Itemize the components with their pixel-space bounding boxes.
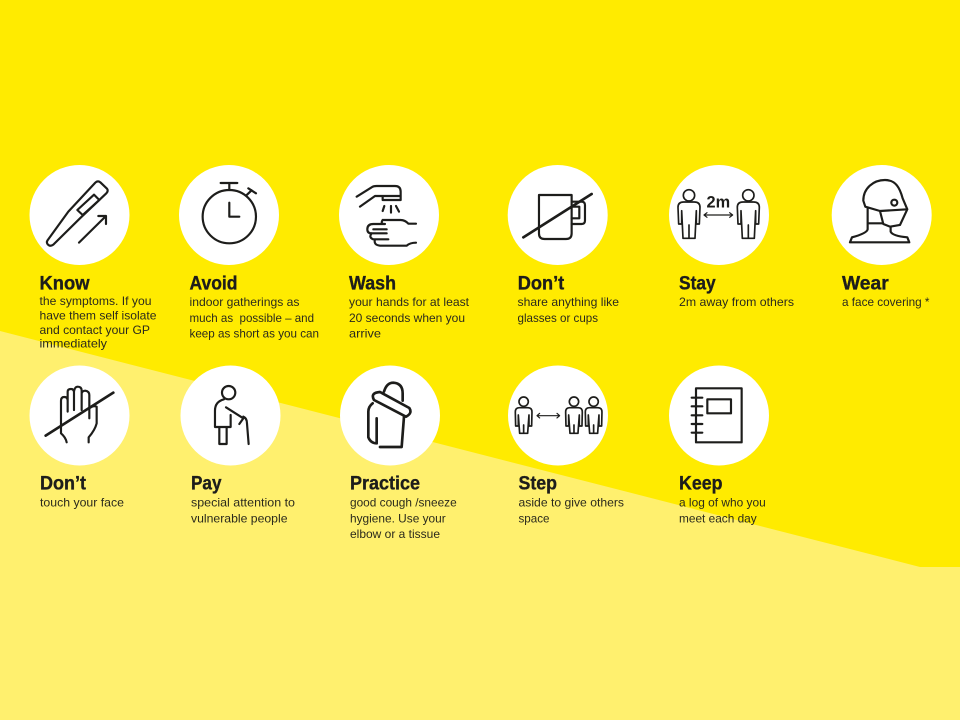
panel: Know: [30, 165, 157, 351]
text block: share anything like: [518, 295, 619, 309]
panel: Don't touch: [30, 366, 130, 510]
text block: [350, 496, 457, 541]
heading: Stay: [679, 274, 716, 294]
text block: space: [518, 512, 550, 526]
text block: [190, 295, 319, 340]
text block: vulnerable people: [191, 512, 288, 526]
text block: indoor gatherings as: [190, 295, 300, 309]
panel: Wash: [339, 165, 470, 340]
icon: two people 2m apart: 2m: [707, 193, 730, 211]
text block: hygiene. Use your: [350, 512, 446, 526]
text block: touch your face: [40, 496, 124, 510]
text block: 20 seconds when you: [349, 311, 465, 325]
panel: Avoid: [179, 165, 319, 340]
heading: Keep: [679, 474, 722, 495]
text block: a face covering *: [842, 295, 930, 309]
text block: have them self isolate: [40, 308, 157, 322]
text block: arrive: [349, 326, 381, 340]
heading: Know: [40, 274, 90, 294]
panel: Wear: [832, 165, 932, 309]
text block: [518, 295, 619, 325]
text block: meet each day: [679, 512, 757, 526]
heading: Step: [518, 474, 557, 495]
icon: spiral notebook: [692, 388, 742, 442]
icon: people stepping aside: [515, 397, 602, 433]
text block: [40, 294, 157, 351]
text block: [518, 496, 624, 526]
panel: Don't share: [508, 165, 619, 325]
panel: Practice: [340, 366, 457, 541]
text block: a log of who you: [679, 496, 766, 510]
panel: Stay: [669, 165, 794, 309]
icon: two people 2m apart: [678, 190, 759, 238]
text block: special attention to: [191, 496, 295, 510]
icon: coughing into elbow: [368, 383, 410, 447]
text block: keep as short as you can: [190, 326, 319, 340]
text block: much as possible – and: [190, 311, 314, 325]
heading: Wash: [349, 274, 396, 294]
text block: glasses or cups: [518, 311, 598, 325]
icon: thermometer: [47, 181, 108, 246]
text block: the symptoms. If you: [40, 294, 152, 308]
text block: elbow or a tissue: [350, 527, 440, 541]
text block: immediately: [40, 337, 107, 351]
heading: Wear: [842, 274, 889, 294]
text block: and contact your GP: [40, 323, 150, 337]
heading: Don’t: [40, 474, 87, 495]
panel: Step: [508, 366, 624, 526]
icon: crossed hand: [46, 387, 113, 442]
icon: head with face mask: [850, 180, 909, 242]
heading: Don’t: [518, 274, 565, 294]
heading: Avoid: [190, 274, 238, 294]
panel: Pay: [180, 366, 295, 526]
text block: your hands for at least: [349, 295, 470, 309]
icon: elderly person with cane: [215, 386, 249, 444]
text block: [349, 295, 470, 340]
text block: good cough /sneeze: [350, 496, 457, 510]
heading: Practice: [350, 474, 420, 495]
heading: Pay: [191, 474, 222, 495]
text block: [191, 496, 295, 526]
text block: aside to give others: [518, 496, 624, 510]
icon: hands under tap: [357, 186, 416, 246]
icon: crossed mug: [523, 194, 592, 239]
text block: 2m away from others: [679, 295, 794, 309]
panel: Keep: [669, 366, 769, 526]
text block: [679, 496, 766, 526]
icon: stopwatch: [203, 183, 256, 243]
